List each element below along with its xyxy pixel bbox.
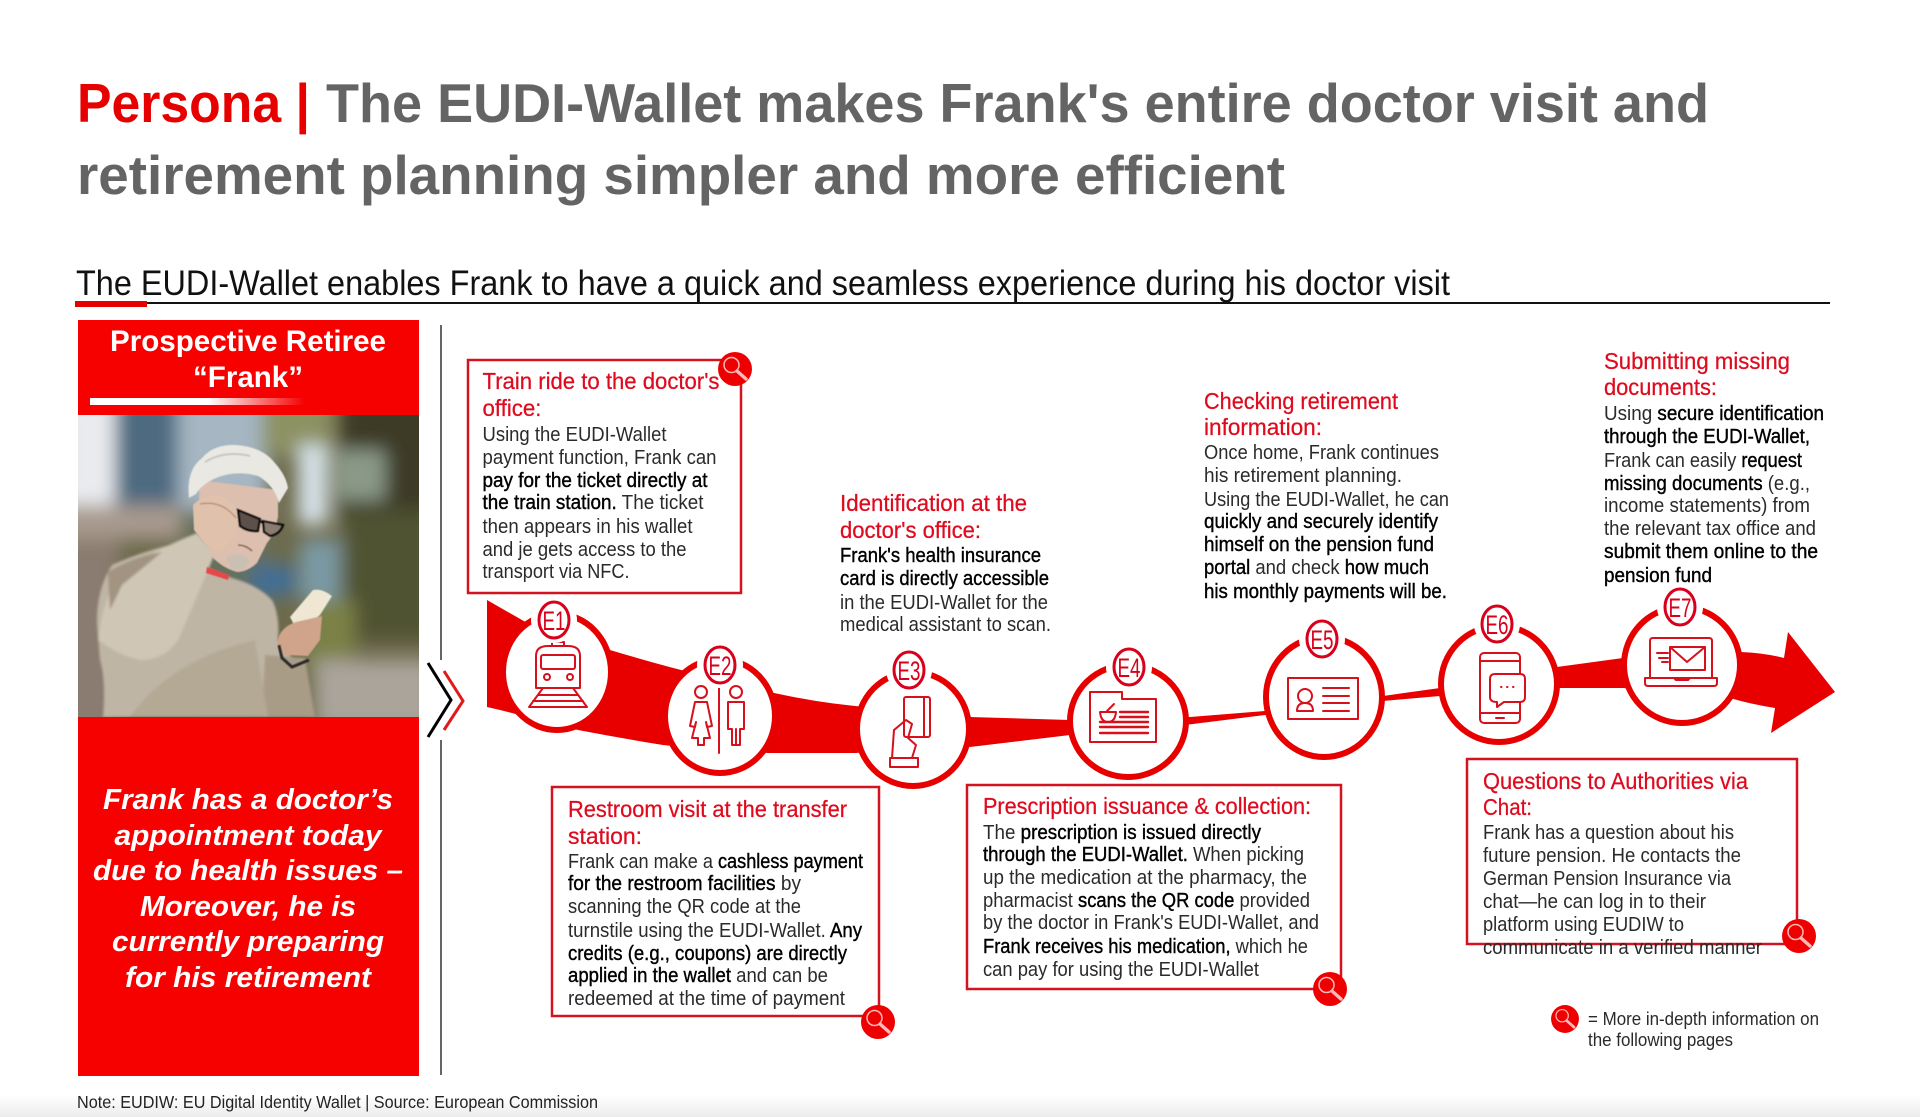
step E2: restroom: E2 xyxy=(708,651,732,681)
E5 body text: himself on the pension fund xyxy=(1204,533,1434,556)
E1 body text: and je gets access to the xyxy=(482,538,686,561)
E2 body text: applied in the wallet and can be xyxy=(568,964,828,987)
E6 heading: Chat: xyxy=(1483,794,1532,820)
E5 heading: information: xyxy=(1204,414,1322,440)
E7 body text: submit them online to the xyxy=(1604,540,1818,563)
E3 heading xyxy=(840,490,1027,543)
E1 body text: then appears in his wallet xyxy=(482,515,693,538)
E6 body text: German Pension Insurance via xyxy=(1483,867,1732,890)
step E7: laptop mail xyxy=(1624,584,1740,723)
E2 body text: credits (e.g., coupons) are directly xyxy=(568,942,848,965)
E1 body text xyxy=(482,423,716,583)
step E3: payment card in hand xyxy=(857,647,969,786)
E2 body text: redeemed at the time of payment xyxy=(568,987,845,1010)
E3 body text: medical assistant to scan. xyxy=(840,613,1051,636)
E6 body text: communicate in a verified manner xyxy=(1483,936,1762,959)
title: retirement planning simpler and more efficient xyxy=(77,144,1285,206)
E7 body text: Using secure identification xyxy=(1604,402,1824,425)
E2 body text: for the restroom facilities by xyxy=(568,872,802,895)
E3 body text: card is directly accessible xyxy=(840,567,1049,590)
E1 body text: payment function, Frank can xyxy=(482,446,716,469)
E4 body text: through the EUDI-Wallet. When picking xyxy=(983,843,1304,866)
E1 heading xyxy=(482,368,720,421)
persona description: due to health issues – xyxy=(93,855,403,887)
footnote: Note: EUDIW: EU Digital Identity Wallet | Source: European Commission xyxy=(77,1092,598,1112)
persona description: Moreover, he is xyxy=(140,891,356,923)
title: The EUDI-Wallet makes Frank's entire doctor visit and xyxy=(326,72,1709,134)
text block E7: submitting documents xyxy=(1604,348,1824,587)
E1 body text: pay for the ticket directly at xyxy=(482,469,708,492)
text block E3: identification xyxy=(840,490,1051,636)
persona heading xyxy=(110,325,386,394)
E7 heading xyxy=(1604,348,1790,400)
E2 body text: Frank can make a cashless payment xyxy=(568,850,863,873)
E1 body text: transport via NFC. xyxy=(482,560,630,583)
E6 body text: Frank has a question about his xyxy=(1483,821,1734,844)
E7 body text: the relevant tax office and xyxy=(1604,517,1816,540)
E2 body text xyxy=(568,850,863,1010)
E5 body text: portal and check how much xyxy=(1204,556,1429,579)
E1 heading: office: xyxy=(482,395,542,421)
step E4: prescription folder xyxy=(1070,644,1186,777)
step E6: phone chat xyxy=(1441,601,1557,742)
step E7: laptop mail: E7 xyxy=(1668,593,1692,623)
persona heading: “Frank” xyxy=(193,361,303,394)
E5 body text: his retirement planning. xyxy=(1204,464,1402,487)
E5 body text: Once home, Frank continues xyxy=(1204,441,1439,464)
icon: magnifier xyxy=(861,1005,895,1039)
E4 heading: Prescription issuance & collection: xyxy=(983,793,1311,819)
title: Persona | xyxy=(77,72,310,135)
E2 body text: scanning the QR code at the xyxy=(568,895,801,918)
hair xyxy=(189,445,288,503)
E5 body text: quickly and securely identify xyxy=(1204,510,1439,533)
E4 body text xyxy=(983,821,1319,981)
step E4: prescription folder: E4 xyxy=(1118,653,1140,683)
persona description: for his retirement xyxy=(125,962,372,994)
E6 body text: chat—he can log in to their xyxy=(1483,890,1706,913)
torso xyxy=(96,545,292,717)
icon: magnifier xyxy=(718,352,752,386)
E1 heading: Train ride to the doctor's xyxy=(482,368,720,394)
background footer shade xyxy=(0,1095,1920,1117)
E1 body text: Using the EUDI-Wallet xyxy=(482,423,667,446)
step E5: ID card xyxy=(1266,616,1382,757)
E2 body text: turnstile using the EUDI-Wallet. Any xyxy=(568,919,863,942)
E4 body text: by the doctor in Frank's EUDI-Wallet, and xyxy=(983,911,1319,934)
callout E4: prescription xyxy=(967,785,1347,1006)
persona heading: Prospective Retiree xyxy=(110,325,386,358)
E4 body text: The prescription is issued directly xyxy=(983,821,1262,844)
persona description: appointment today xyxy=(114,820,383,852)
E7 body text xyxy=(1604,402,1824,587)
text block E5: retirement information xyxy=(1204,388,1449,603)
E3 heading: Identification at the xyxy=(840,490,1027,516)
E4 body text: up the medication at the pharmacy, the xyxy=(983,866,1307,889)
E7 body text: income statements) from xyxy=(1604,494,1810,517)
step E1: train xyxy=(503,597,611,730)
E2 heading: station: xyxy=(568,823,642,849)
E7 body text: Frank can easily request xyxy=(1604,449,1802,472)
E1 body text: the train station. The ticket xyxy=(482,491,704,514)
E5 body text: his monthly payments will be. xyxy=(1204,580,1447,603)
E6 heading xyxy=(1483,768,1748,820)
face xyxy=(199,480,278,572)
E6 body text: future pension. He contacts the xyxy=(1483,844,1741,867)
glasses xyxy=(238,510,260,531)
E2 heading: Restroom visit at the transfer xyxy=(568,796,847,822)
E3 body text: in the EUDI-Wallet for the xyxy=(840,591,1048,614)
E6 body text xyxy=(1483,821,1762,959)
E3 heading: doctor's office: xyxy=(840,517,981,543)
E7 body text: through the EUDI-Wallet, xyxy=(1604,425,1810,448)
icon: magnifier xyxy=(1782,919,1816,953)
step E1: train: E1 xyxy=(542,606,566,636)
callout E2: restroom visit xyxy=(552,787,895,1039)
collar xyxy=(206,567,229,580)
E6 body text: platform using EUDIW to xyxy=(1483,913,1684,936)
phone hand xyxy=(290,589,332,624)
E5 heading: Checking retirement xyxy=(1204,388,1399,414)
callout E6: questions via chat xyxy=(1467,759,1816,959)
E7 body text: pension fund xyxy=(1604,564,1712,587)
title xyxy=(77,72,1709,206)
step E2: restroom xyxy=(665,642,775,773)
divider and chevron arrow xyxy=(426,325,463,1075)
persona description xyxy=(93,784,403,994)
photo: man looking at smartphone xyxy=(78,415,419,717)
hand at temple xyxy=(192,500,207,545)
E3 body text xyxy=(840,544,1051,636)
callout E1: train ride xyxy=(468,352,752,593)
legend xyxy=(1551,1005,1819,1050)
persona description: Frank has a doctor’s xyxy=(103,784,393,816)
legend: = More in-depth information on xyxy=(1588,1009,1819,1029)
step E6: phone chat: E6 xyxy=(1486,610,1508,640)
E4 body text: can pay for using the EUDI-Wallet xyxy=(983,958,1259,981)
panel: persona Frank xyxy=(78,320,419,1076)
step E5: ID card: E5 xyxy=(1310,625,1334,655)
E7 body text: missing documents (e.g., xyxy=(1604,472,1810,495)
persona description: currently preparing xyxy=(112,926,384,958)
E7 heading: Submitting missing xyxy=(1604,348,1790,374)
subheading: The EUDI-Wallet enables Frank to have a quick and seamless experience during his doctor visit xyxy=(76,264,1450,303)
E5 heading xyxy=(1204,388,1399,440)
E5 body text: Using the EUDI-Wallet, he can xyxy=(1204,488,1449,511)
E4 body text: Frank receives his medication, which he xyxy=(983,935,1308,958)
legend: the following pages xyxy=(1588,1030,1733,1050)
journey arrow band xyxy=(487,600,1835,753)
E6 heading: Questions to Authorities via xyxy=(1483,768,1748,794)
E3 body text: Frank's health insurance xyxy=(840,544,1041,567)
E5 body text xyxy=(1204,441,1449,603)
E2 heading xyxy=(568,796,847,849)
icon: magnifier xyxy=(1313,972,1347,1006)
E7 heading: documents: xyxy=(1604,374,1717,400)
step E3: payment card in hand: E3 xyxy=(898,656,920,686)
E4 body text: pharmacist scans the QR code provided xyxy=(983,889,1310,912)
raised arm xyxy=(98,533,215,660)
